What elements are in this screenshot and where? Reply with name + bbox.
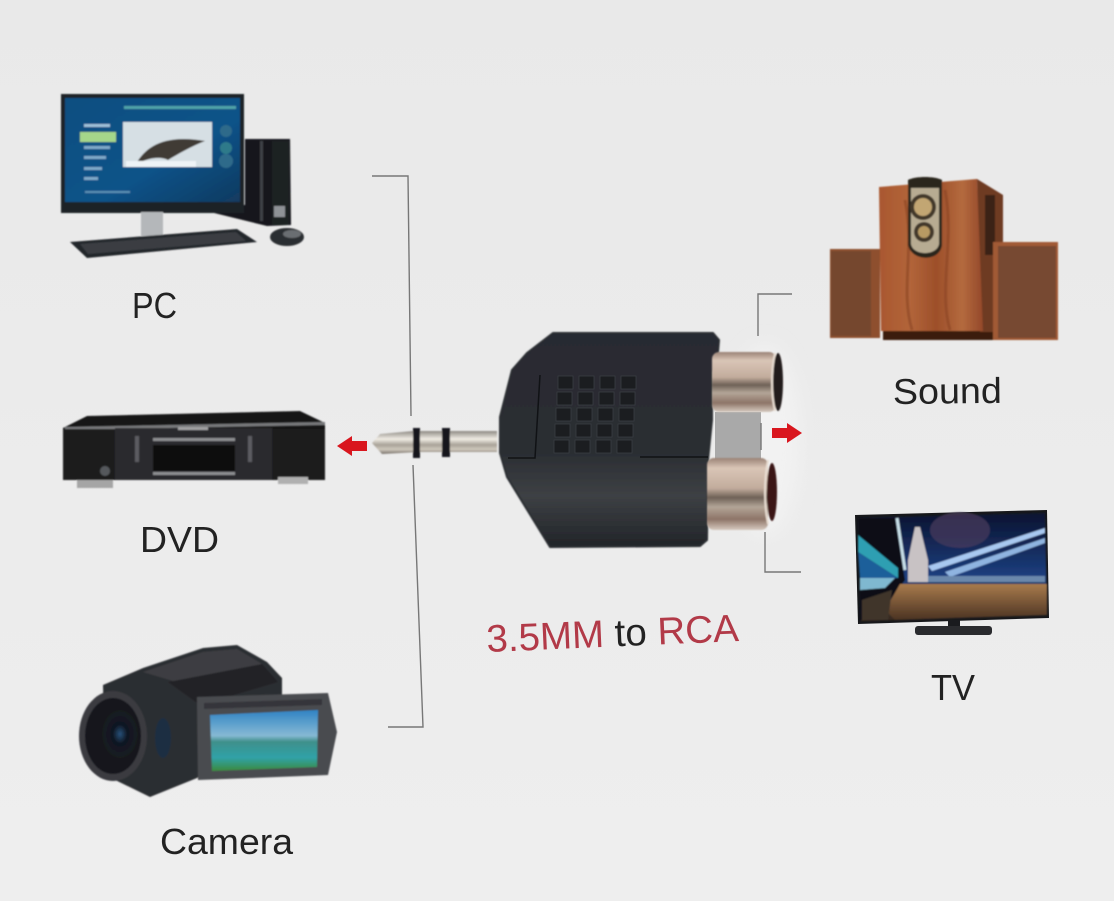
arrow: left red: [337, 436, 367, 456]
label: Sound: Sound: [893, 370, 1002, 412]
icon: DVD player: [63, 411, 325, 488]
grid texture: [554, 376, 636, 453]
adapter label: 3.5MM to RCA: [486, 607, 740, 661]
icon: TV: [855, 510, 1049, 635]
adapter body: [500, 333, 719, 547]
gap between sockets: [715, 412, 761, 460]
lower RCA socket: [707, 458, 777, 530]
upper RCA socket: [712, 352, 783, 412]
left bracket: [372, 176, 423, 727]
icon: 3.5mm to RCA adapter: [372, 333, 783, 547]
label: Camera: Camera: [160, 821, 294, 862]
label: TV: TV: [931, 667, 975, 708]
jack plug: [372, 428, 497, 458]
icon: speakers: [830, 177, 1058, 340]
icon: camera: [79, 645, 337, 797]
right bracket: [758, 294, 801, 572]
label: PC: PC: [132, 285, 177, 326]
socket highlight: [730, 345, 800, 535]
label: DVD: DVD: [140, 519, 219, 560]
arrow: right red: [772, 423, 802, 443]
icon: PC: [61, 94, 304, 258]
